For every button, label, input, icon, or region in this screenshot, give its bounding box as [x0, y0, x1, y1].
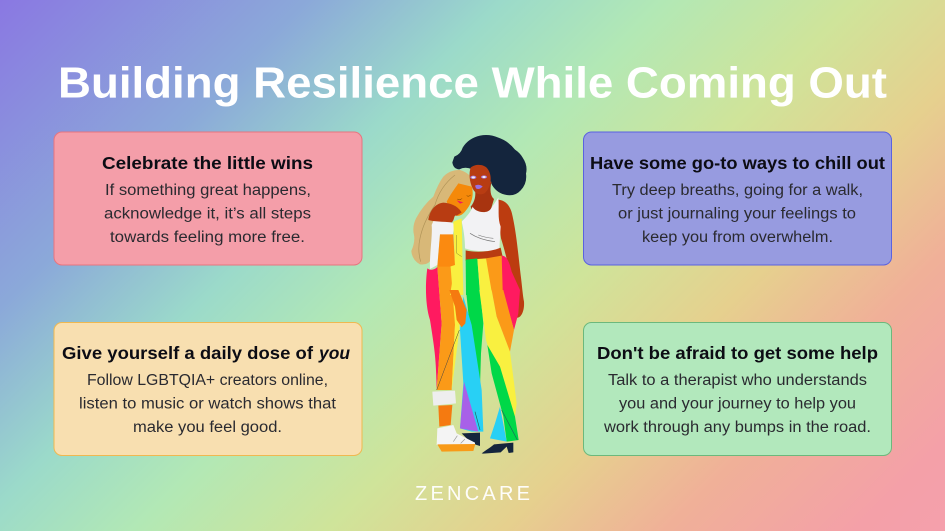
heading: get some help: Don't be afraid to get some help	[597, 343, 878, 363]
panel: get some help	[584, 322, 892, 456]
text: celebrate body: towards feeling more free.	[110, 229, 305, 246]
necklace line	[437, 330, 459, 390]
text: get help body: work through any bumps in the road.	[603, 419, 871, 436]
text: chill out body: or just journaling your feelings to	[618, 206, 856, 222]
text: daily dose body: Follow LGBTQIA+ creators online,	[87, 372, 328, 389]
text: get help body: you and your journey to help you	[619, 396, 856, 412]
cuff	[432, 391, 456, 406]
heading: chill out: Have some go-to ways to chill out	[590, 153, 885, 173]
text: get help body: Talk to a therapist who understands	[608, 372, 867, 389]
right woman embracing arm and hand	[428, 203, 462, 222]
left woman shirt	[430, 215, 455, 269]
heading: celebrate the little wins: Celebrate the little wins	[102, 153, 313, 173]
illustration: two women embracing in rainbow clothes	[411, 135, 527, 454]
panel: daily dose of you	[54, 322, 362, 456]
panel: chill out	[584, 132, 892, 265]
left woman face	[447, 183, 473, 216]
right woman face	[470, 165, 491, 194]
right woman pants	[466, 290, 483, 387]
text: chill out body: Try deep breaths, going for a walk,	[612, 182, 863, 199]
left woman pants	[426, 267, 442, 390]
white tank top	[462, 198, 501, 251]
title: Building Resilience While Coming Out	[58, 58, 887, 108]
orange sole	[437, 444, 475, 452]
boots	[462, 433, 480, 446]
right woman arm	[497, 200, 524, 318]
logo: zencare: ZENCARE	[415, 483, 530, 505]
text: get help body	[603, 372, 871, 436]
midriff	[466, 248, 503, 261]
text: celebrate body: If something great happens,	[105, 182, 311, 199]
text: chill out body: keep you from overwhelm.	[642, 229, 833, 246]
text: celebrate body: acknowledge it, it’s all steps	[104, 206, 311, 222]
white sneaker	[437, 425, 475, 445]
blonde hair	[411, 170, 473, 265]
dark afro hair	[452, 135, 527, 195]
heading: daily dose of you: you	[318, 343, 350, 363]
hair strands	[419, 175, 455, 262]
text: daily dose body: listen to music or watch shows that	[79, 396, 337, 412]
text: celebrate body	[104, 182, 311, 246]
heading: daily dose of you: Give yourself a daily dose of	[62, 343, 313, 363]
text: chill out body	[612, 182, 863, 246]
left woman arm and hand	[449, 290, 467, 327]
text: daily dose body	[79, 372, 337, 436]
text: daily dose body: make you feel good.	[133, 419, 282, 436]
panel: celebrate the little wins	[54, 132, 362, 265]
lower leg	[438, 405, 452, 427]
right woman neck and chest	[471, 182, 494, 212]
